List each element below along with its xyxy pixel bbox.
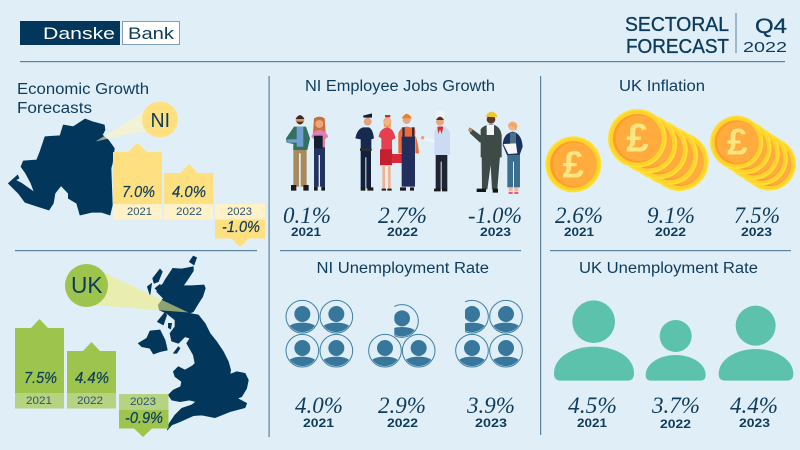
bar: NI 2022: 4.0% <box>172 184 206 201</box>
stat: inflation 2022: 2022 <box>655 227 686 239</box>
stat: NI unemployment 2022: 2.9% <box>378 393 426 418</box>
bar: UK 2021: 2021 <box>26 395 52 407</box>
header: report title: FORECAST <box>626 36 729 58</box>
icon: person 2023 <box>719 306 793 381</box>
bar: NI 2023 <box>215 204 265 247</box>
bar: UK 2022: 2022 <box>77 395 103 407</box>
callout: UK: UK <box>71 272 103 298</box>
stat: inflation 2021 <box>555 203 603 239</box>
callout: NI: NI <box>150 110 170 132</box>
stat: NI unemployment 2022: 2022 <box>387 418 418 430</box>
stat: UK unemployment 2023: 2023 <box>739 418 770 430</box>
icon: person 2022 <box>646 320 706 381</box>
icon group: people 2022 <box>369 305 435 367</box>
bar: UK 2023 <box>119 394 168 437</box>
stat: jobs 2022: 2.7% <box>378 203 427 228</box>
bar: NI 2021: 2021 <box>127 206 152 218</box>
stat: NI unemployment 2023: 2023 <box>475 418 507 430</box>
stat: inflation 2022 <box>647 203 695 239</box>
heading: UK inflation: UK Inflation <box>619 78 705 95</box>
heading: economic growth forecasts: Forecasts <box>17 100 92 117</box>
map: United Kingdom <box>138 256 248 430</box>
stat: jobs 2023: -1.0% <box>468 203 522 228</box>
bar: NI 2021: 7.0% <box>122 184 155 201</box>
icon: coin stack 2023 <box>710 116 796 191</box>
icon: coin stack 2023: £ <box>727 122 748 163</box>
illustration: workers 2021 <box>286 115 328 191</box>
panel: NI economic growth <box>8 81 265 247</box>
stat: UK unemployment 2021: 2021 <box>577 418 608 430</box>
icon: one coin 2021 <box>545 136 601 192</box>
panel: NI unemployment rate <box>286 260 522 430</box>
stat: NI unemployment 2023 <box>466 393 515 430</box>
callout: UK <box>65 264 188 312</box>
stat: UK unemployment 2023: 4.4% <box>730 393 778 418</box>
stat: jobs 2023 <box>468 203 522 239</box>
stat: jobs 2021: 0.1% <box>283 203 331 228</box>
heading: economic growth forecasts: Economic Growth <box>17 81 149 98</box>
icon group: people 2023 <box>456 300 522 367</box>
bar: NI 2022 <box>164 164 214 220</box>
bar: UK 2023: 2023 <box>130 396 156 408</box>
stat: inflation 2023: 2023 <box>741 227 772 239</box>
stat: NI unemployment 2021 <box>295 393 343 430</box>
header: report title <box>625 13 787 58</box>
stat: jobs 2022: 2022 <box>387 227 418 239</box>
bar: UK 2021 <box>15 319 64 408</box>
stat: inflation 2022: 9.1% <box>647 203 695 228</box>
header: Danske Bank logo: Danske <box>43 25 115 43</box>
panel: UK unemployment rate <box>554 260 793 431</box>
stat: inflation 2021: 2021 <box>564 227 595 239</box>
icon: person 2021 <box>554 300 634 381</box>
illustration: workers 2023 <box>468 112 523 194</box>
panel: NI employee jobs growth <box>283 78 523 239</box>
stat: UK unemployment 2022: 2022 <box>660 419 691 431</box>
stat: inflation 2023 <box>734 203 780 239</box>
bar: NI 2022: 2022 <box>176 206 202 218</box>
stat: NI unemployment 2022 <box>378 393 426 430</box>
stat: jobs 2022 <box>378 203 427 239</box>
heading: UK unemployment rate: UK Unemployment Rate <box>579 260 758 277</box>
stat: UK unemployment 2023 <box>730 393 778 430</box>
stat: jobs 2023: 2023 <box>480 227 511 239</box>
panel: UK inflation <box>545 78 796 239</box>
bar: UK 2022 <box>67 342 116 408</box>
stat: inflation 2021: 2.6% <box>555 203 603 228</box>
bar: UK 2023: -0.9% <box>125 410 163 427</box>
bar: NI 2023: 2023 <box>227 206 252 218</box>
icon group: people 2021 <box>286 300 353 367</box>
heading: NI unemployment rate: NI Unemployment Rate <box>316 260 489 277</box>
stat: inflation 2023: 7.5% <box>734 203 780 228</box>
icon: coin stack 2022 <box>608 109 709 191</box>
bar: NI 2023: -1.0% <box>222 219 260 236</box>
stat: UK unemployment 2021 <box>568 393 617 430</box>
icon: one coin 2021: £ <box>563 143 584 186</box>
stat: UK unemployment 2021: 4.5% <box>568 393 617 418</box>
header: report title: SECTORAL <box>625 14 729 36</box>
bar: UK 2022: 4.4% <box>75 370 109 387</box>
stat: NI unemployment 2023: 3.9% <box>466 393 515 418</box>
heading: NI employee jobs growth: NI Employee Jobs Growth <box>305 78 495 95</box>
stat: UK unemployment 2022: 3.7% <box>651 393 700 418</box>
stat: jobs 2021: 2021 <box>291 227 322 239</box>
header: report title: 2022 <box>743 39 787 56</box>
header: Danske Bank logo <box>20 21 180 45</box>
stat: jobs 2021 <box>283 203 331 239</box>
illustration: workers 2022 <box>355 111 450 191</box>
stat: NI unemployment 2021: 2021 <box>303 418 335 430</box>
header: Danske Bank logo: Bank <box>128 25 175 43</box>
bar: UK 2021: 7.5% <box>24 370 57 387</box>
panel: UK economic growth <box>15 256 248 437</box>
callout: NI <box>96 102 178 142</box>
stat: UK unemployment 2022 <box>651 393 700 431</box>
map: Northern Ireland <box>8 119 114 215</box>
bar: NI 2021 <box>113 143 162 220</box>
heading: economic growth forecasts <box>17 81 149 117</box>
header: report title: Q4 <box>755 15 787 38</box>
icon: coin stack 2022: £ <box>626 117 648 161</box>
stat: NI unemployment 2021: 4.0% <box>295 393 343 418</box>
